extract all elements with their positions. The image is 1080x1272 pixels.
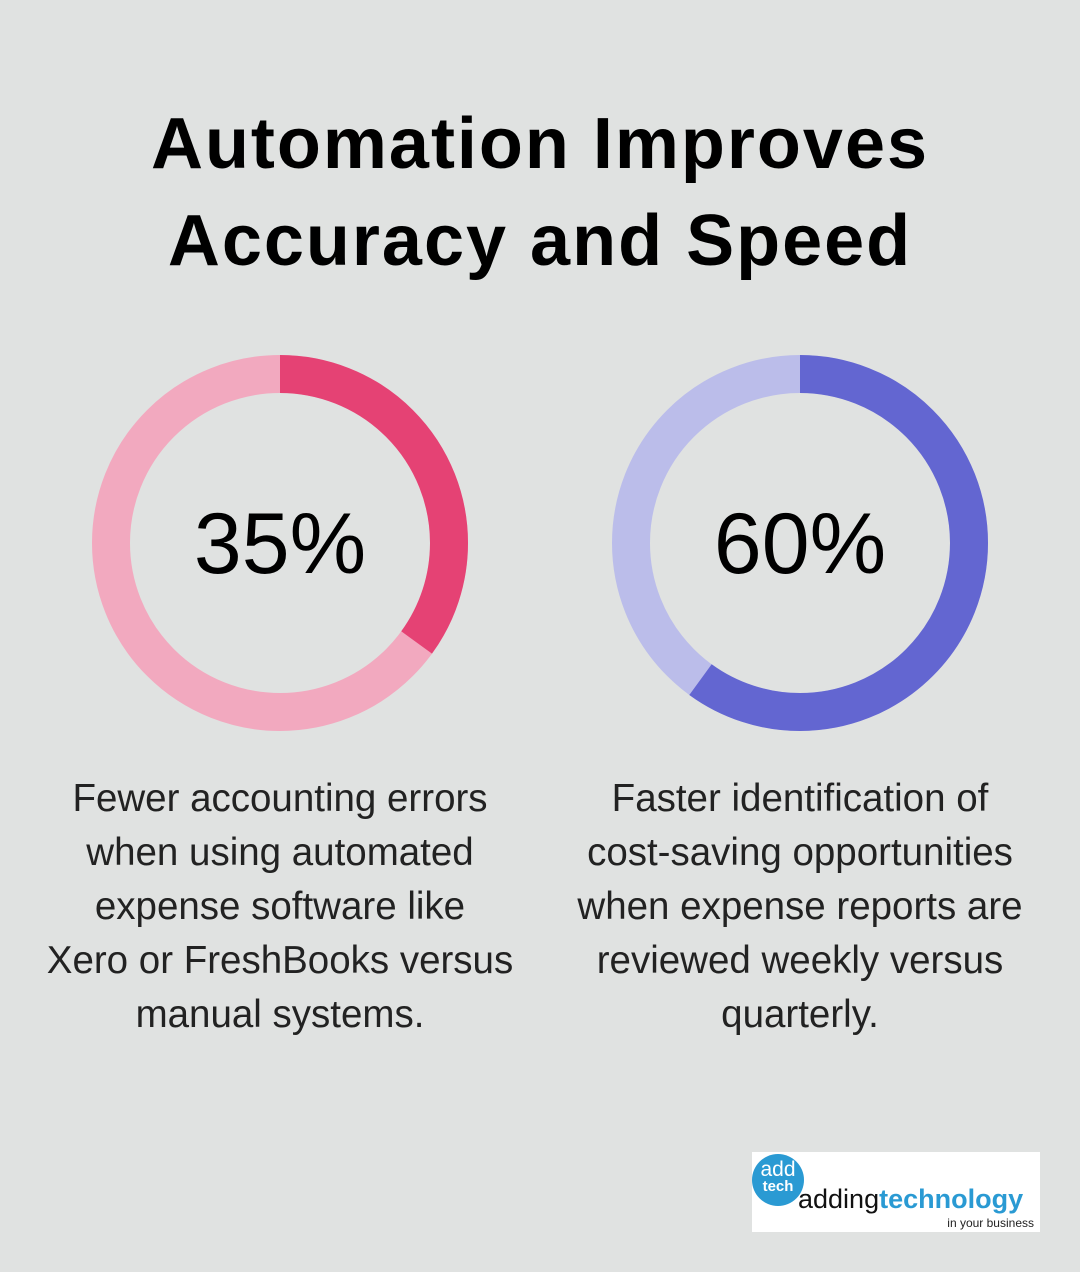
title: Automation Improves <box>151 104 929 184</box>
text: left description: expense software like <box>95 885 465 928</box>
text: left description: Xero or FreshBooks versus <box>47 939 513 982</box>
chart: 35% donut: 35% <box>194 496 366 592</box>
text: right description: quarterly. <box>721 993 879 1036</box>
logo <box>752 1152 1040 1232</box>
text: logo wordmark: addingtechnology <box>798 1184 1023 1214</box>
chart: 60% donut: 60% <box>714 496 886 592</box>
icon: add tech circle: add <box>760 1158 796 1181</box>
icon: add tech circle: tech <box>763 1178 793 1195</box>
chart: 35% donut <box>92 355 468 731</box>
text: left description: when using automated <box>86 831 474 874</box>
title: Accuracy and Speed <box>168 201 912 281</box>
text: right description: Faster identification of <box>612 777 988 820</box>
text: left description: Fewer accounting errors <box>72 777 488 820</box>
text: right description: reviewed weekly versus <box>597 939 1003 982</box>
text: right description: when expense reports are <box>577 885 1023 928</box>
text: left description <box>47 777 513 1036</box>
chart: 60% donut <box>612 355 988 731</box>
text: logo tagline: in your business <box>947 1216 1034 1230</box>
text: right description <box>577 777 1023 1036</box>
text: right description: cost-saving opportunities <box>587 831 1013 874</box>
title <box>151 104 929 281</box>
icon: add tech circle <box>752 1154 804 1206</box>
text: left description: manual systems. <box>136 993 424 1036</box>
